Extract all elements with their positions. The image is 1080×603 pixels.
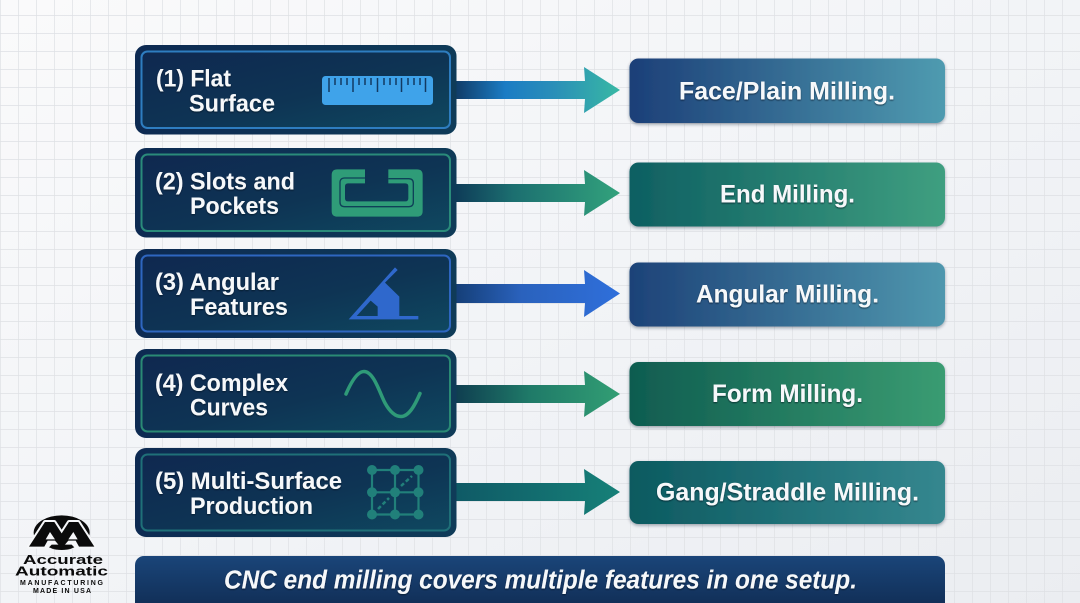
icon: wave	[346, 372, 420, 416]
result: form milling	[630, 362, 945, 426]
panel: complex curves	[135, 349, 456, 438]
icon: ruler	[322, 76, 433, 105]
logo: Accurate Automatic Manufacturing: MANUFACTURING	[20, 580, 104, 587]
banner: summary	[135, 556, 945, 603]
banner: summary: CNC end milling covers multiple features in one setup.	[224, 566, 857, 594]
label: slots and pockets	[155, 168, 295, 220]
logo: Accurate Automatic Manufacturing	[15, 515, 108, 595]
arrow 3: angular features to angular milling	[455, 270, 620, 317]
arrow 2: slots to end milling	[455, 170, 620, 216]
logo: Accurate Automatic Manufacturing: MADE IN USA	[33, 588, 91, 595]
label: flat surface: Surface	[189, 91, 275, 118]
result: face/plain milling	[630, 58, 945, 123]
label: multi-surface production	[155, 468, 342, 520]
panel: multi-surface production	[135, 448, 456, 537]
logo: Accurate Automatic Manufacturing: Accurate	[23, 552, 103, 567]
result: face/plain milling: Face/Plain Milling.	[679, 78, 895, 106]
icon: node grid	[367, 465, 424, 520]
panel: angular features	[135, 249, 456, 338]
panel: slots and pockets	[135, 148, 456, 238]
arrow 1: flat surface to face milling	[455, 67, 620, 113]
logo: Accurate Automatic Manufacturing: Automatic	[15, 564, 108, 579]
label: slots and pockets: (2) Slots and	[155, 168, 295, 195]
panel: flat surface	[135, 45, 456, 134]
arrow 5: multi-surface to gang milling	[455, 469, 620, 515]
result: gang/straddle milling	[630, 461, 945, 524]
logo mark	[29, 515, 94, 550]
result: angular milling	[630, 262, 945, 326]
label: flat surface	[156, 66, 275, 118]
label: slots and pockets: Pockets	[190, 193, 279, 220]
label: complex curves: Curves	[190, 394, 268, 422]
icon: angle	[349, 267, 418, 319]
result: end milling: End Milling.	[720, 181, 855, 209]
icon: slot	[332, 169, 423, 217]
label: angular features	[155, 269, 288, 321]
result: gang/straddle milling: Gang/Straddle Milling.	[656, 479, 919, 507]
label: flat surface: (1) Flat	[156, 66, 231, 93]
label: angular features: (3) Angular	[155, 269, 279, 296]
label: complex curves: (4) Complex	[155, 370, 289, 397]
result: end milling	[630, 162, 945, 226]
label: angular features: Features	[190, 294, 288, 321]
label: multi-surface production: Production	[190, 493, 313, 520]
arrow 4: complex curves to form milling	[455, 371, 620, 417]
label: complex curves	[155, 370, 289, 422]
label: multi-surface production: (5) Multi-Surface	[155, 468, 342, 495]
result: angular milling: Angular Milling.	[696, 280, 879, 308]
result: form milling: Form Milling.	[712, 380, 863, 408]
